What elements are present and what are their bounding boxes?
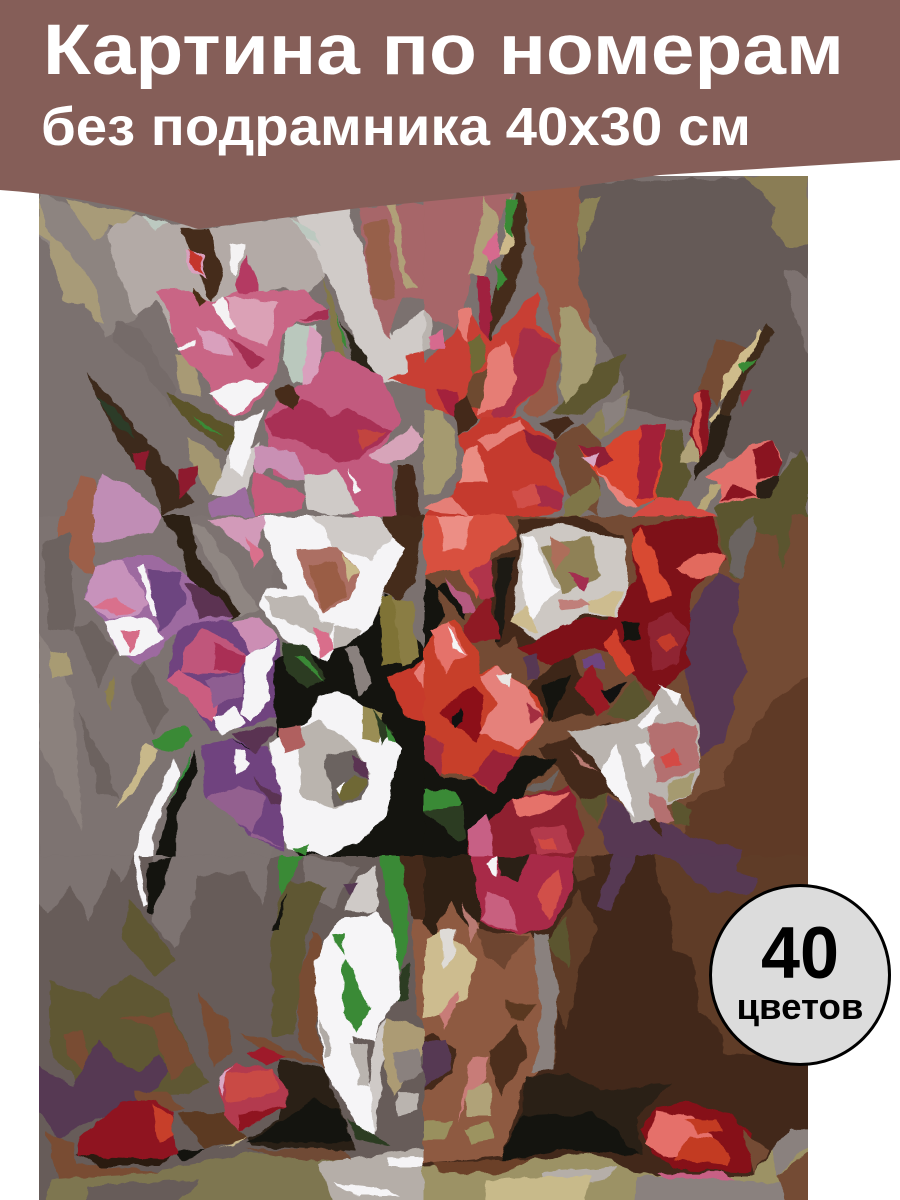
badge: 40 colours	[710, 886, 890, 1064]
painting: lower left, wall, white vase and red fruit	[29, 856, 424, 1200]
subtitle: без подрамника 40х30 см	[41, 97, 751, 157]
painting: gladioli in a vase	[10, 160, 840, 1200]
header banner	[0, 0, 900, 229]
painting: upper left, pink gladiolus	[39, 193, 424, 516]
badge caption: цветов	[736, 986, 864, 1027]
painting: middle left, purple gladiolus and white flowers	[39, 516, 424, 856]
title: Картина по номерам	[43, 11, 844, 90]
badge number: 40	[761, 913, 839, 994]
painting: middle right, poppy-red flowers and white flower	[424, 516, 812, 856]
painting: lower right, dark wall, pink flower, vase and fruit	[424, 856, 812, 1200]
painting: upper right, red gladiolus and buds	[424, 176, 809, 516]
